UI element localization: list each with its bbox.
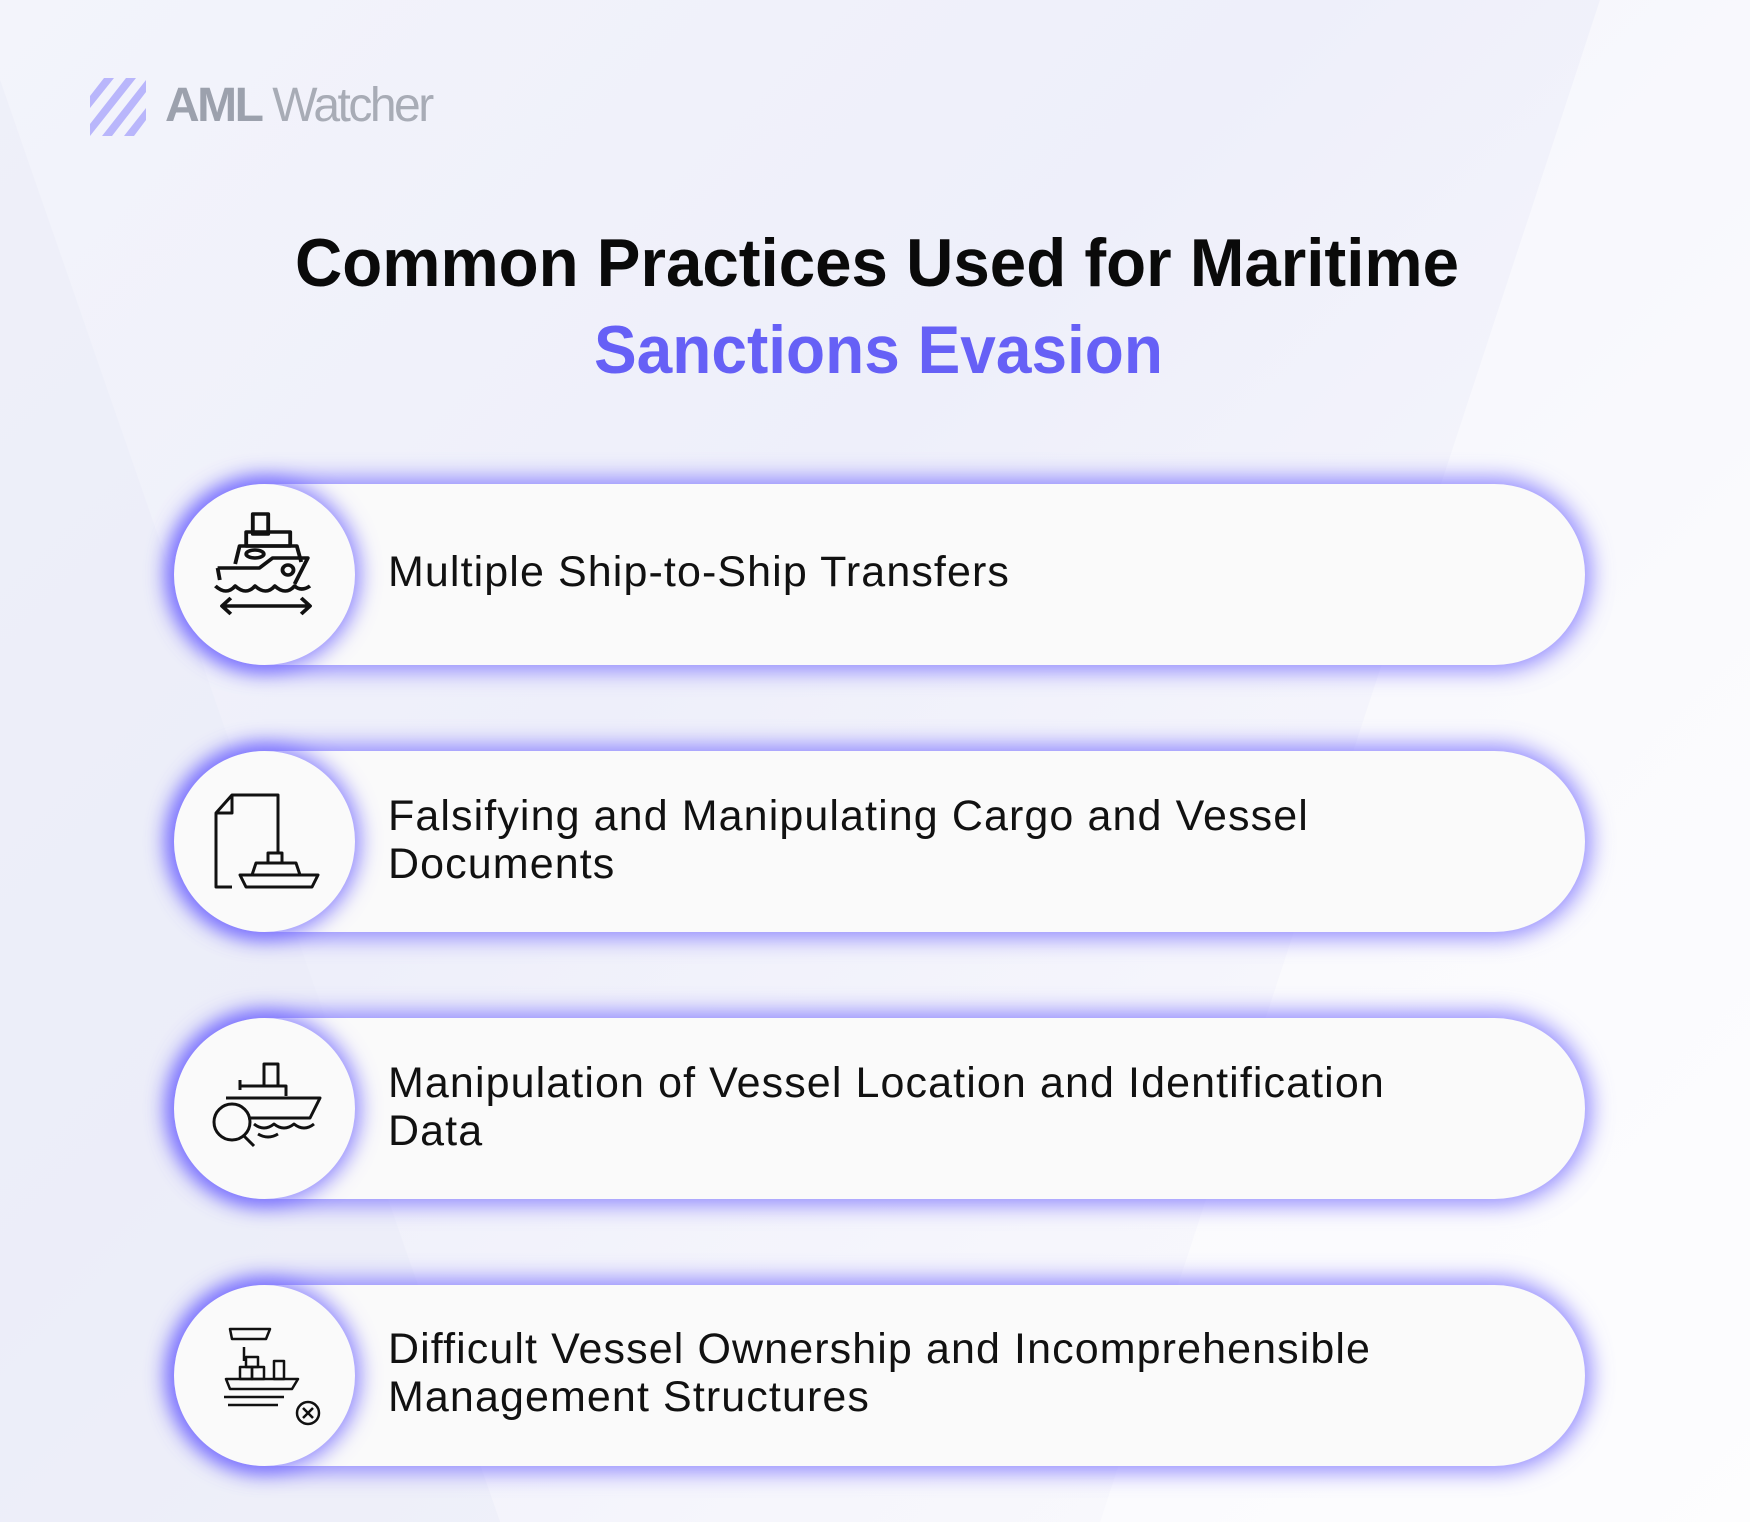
text: Multiple Ship-to-Ship Transfers: [388, 548, 1010, 596]
panel: falsifying documents: [174, 751, 1585, 932]
text: Falsifying and Manipulating Cargo and Vessel: [388, 792, 1309, 840]
icon: cargo ship with x: [174, 1285, 355, 1466]
icon: ship with magnifier: [174, 1018, 355, 1199]
title: Common Practices Used for Maritime: [295, 225, 1459, 301]
title: Sanctions Evasion: [594, 312, 1163, 388]
title: [295, 225, 1459, 388]
panel: ship-to-ship transfers: [174, 484, 1585, 665]
text: [388, 1059, 1385, 1155]
text: Difficult Vessel Ownership and Incomprehensible: [388, 1325, 1371, 1373]
text: [388, 1325, 1371, 1421]
logo text: AML Watcher: [165, 79, 432, 132]
panel: location manipulation: [174, 1018, 1585, 1199]
panel: ownership structures: [174, 1285, 1585, 1466]
text: Management Structures: [388, 1373, 870, 1421]
text: Documents: [388, 840, 615, 888]
icon: document with ship: [174, 751, 355, 932]
icon: ship with arrow: [174, 484, 355, 665]
text: Manipulation of Vessel Location and Identification: [388, 1059, 1385, 1107]
text: Data: [388, 1107, 483, 1155]
text: [388, 792, 1309, 888]
icon: logo mark: [90, 78, 146, 136]
logo: [90, 78, 434, 136]
